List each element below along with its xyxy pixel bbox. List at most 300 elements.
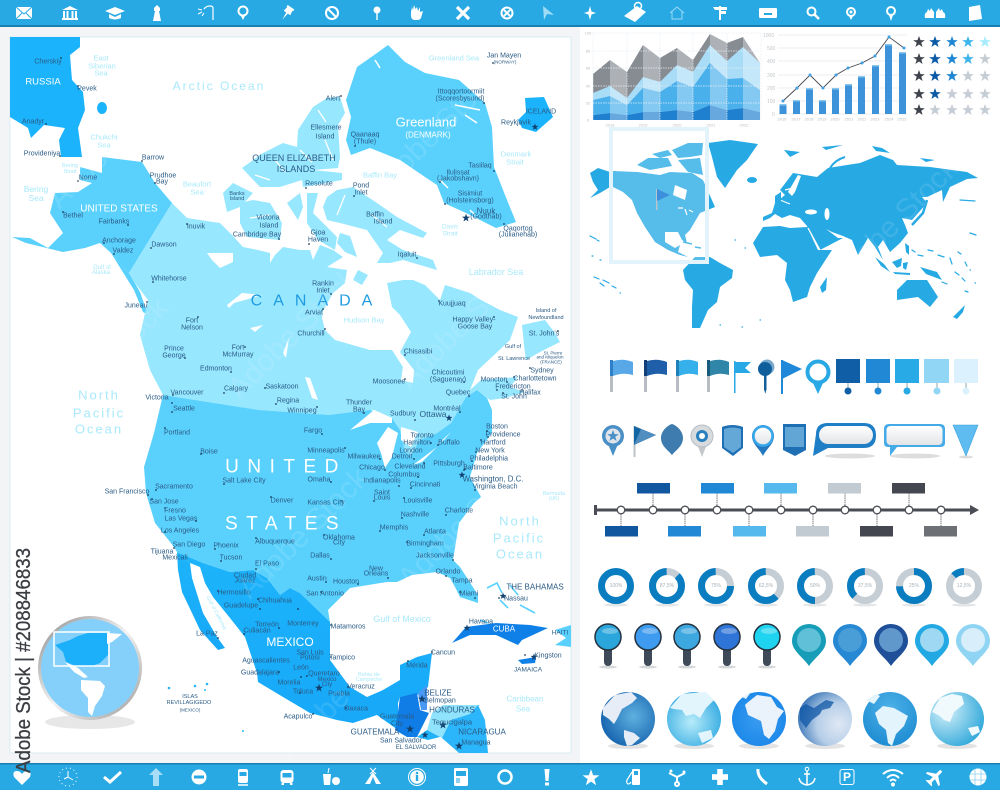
bar chart years: 2024: [885, 116, 894, 122]
city labels: Salt Lake City: [222, 478, 266, 484]
bar chart axis labels: 100: [767, 99, 776, 105]
country and region labels: THE BAHAMAS: [506, 582, 564, 592]
donut 87,5%: [646, 565, 688, 607]
icon: location ring: [238, 6, 248, 20]
city labels: Nome: [79, 174, 97, 182]
city labels: León: [293, 664, 309, 672]
city labels: St. John's: [529, 330, 560, 338]
city labels: Island: [260, 222, 278, 230]
world: Southeast Asia islands: [875, 243, 942, 280]
city labels: Haven: [308, 236, 328, 244]
donut 75%: [702, 572, 730, 600]
country and region labels: BELIZE: [424, 688, 452, 698]
city labels: Chicago: [359, 464, 385, 472]
stock watermarks: Adobe Stock: [31, 291, 176, 435]
water body labels: Baffin Bay: [363, 170, 397, 180]
pin gloss: [602, 628, 777, 634]
pin stems: [604, 645, 771, 666]
city labels: Qaqortoq: [503, 226, 533, 232]
icon: compass cross: [584, 6, 596, 20]
globe: Asia: [930, 692, 984, 746]
city labels: Newfoundland: [528, 315, 564, 321]
city labels: City: [333, 540, 346, 546]
flag three: [676, 360, 698, 392]
icon: wifi: [883, 770, 903, 786]
city labels: (Jakobshavn): [437, 176, 479, 182]
city labels: Prince: [164, 346, 184, 352]
flag two: [644, 360, 667, 392]
city labels: Ottawa: [420, 409, 447, 419]
bar chart years: 2020: [831, 116, 840, 122]
triangle flag: [781, 360, 802, 394]
world: Hudson Bay: [673, 185, 687, 200]
column highlights: [610, 33, 760, 120]
city labels: Louis: [374, 494, 391, 502]
city labels: Toluca: [293, 688, 313, 696]
city labels: Island: [316, 134, 334, 140]
city labels: Oklahoma: [323, 534, 355, 542]
icon: graduation cap: [105, 7, 125, 20]
world: South America: [683, 257, 733, 328]
city labels: Albuquerque: [255, 538, 295, 546]
world: Caribbean: [683, 242, 701, 248]
donut 100%: [602, 572, 630, 600]
city labels: Nashville: [401, 512, 429, 518]
city labels: Portland: [164, 430, 190, 436]
bar chart axis labels: 0: [772, 112, 775, 118]
Greenland: [346, 45, 516, 228]
city labels: Tampa: [451, 578, 473, 584]
city labels: Boston: [486, 424, 508, 430]
city labels: Kuujjuaq: [438, 300, 466, 308]
world: Iceland: [747, 177, 757, 183]
world: Baltic detail: [780, 188, 793, 204]
icon: ticket: [759, 8, 777, 18]
bottom toolbar band: [0, 763, 1000, 790]
city labels: Regina: [277, 398, 299, 404]
Hispaniola: [555, 625, 571, 647]
city labels: Toronto: [410, 432, 434, 440]
Honduras: [427, 705, 480, 738]
icon: paired hands: [925, 8, 945, 18]
globe: South America: [863, 692, 917, 746]
water body labels: Strait: [64, 169, 77, 175]
country and region labels: (MEXICO): [180, 708, 201, 712]
panel: glass lollipop pins: [595, 624, 780, 668]
drop pin navy: [874, 624, 908, 666]
bottom toolbar: [0, 763, 1000, 790]
panel: timeline: [594, 483, 979, 536]
Revillagigedo islands: [168, 683, 244, 732]
city labels: Nassau: [504, 596, 528, 602]
city labels: Ellesmere: [310, 124, 342, 132]
city labels: Managua: [461, 740, 491, 746]
icon: target pin: [847, 8, 855, 20]
city labels: Fresno: [164, 508, 186, 514]
city labels: Orleans: [364, 570, 389, 578]
icon: magnifier: [808, 8, 819, 19]
icon: ATM: [454, 768, 468, 786]
city labels: Qaanaaq: [351, 132, 380, 138]
icon: shower: [198, 6, 213, 20]
timeline arrow: [970, 505, 979, 515]
icon: folded map: [624, 2, 646, 22]
stock watermarks: Adobe Stock: [361, 61, 506, 205]
city labels: Edmonton: [200, 366, 232, 372]
globe: Asia Pacific: [667, 692, 721, 746]
city labels: Goose Bay: [458, 324, 493, 330]
country and region labels: [25, 76, 568, 751]
city labels: (Julianehåb): [499, 230, 537, 238]
world: Red Sea: [808, 228, 820, 250]
donut 37,5%: 37,5%: [858, 583, 873, 589]
city labels: Chihuahua: [258, 598, 292, 604]
city labels: Baltimore: [463, 464, 493, 472]
icon: parking: P: [843, 770, 851, 784]
icon: phone: [758, 769, 767, 784]
city labels: (Scoresbysund): [435, 96, 485, 102]
globe Greenland: [107, 633, 122, 644]
country and region labels: CANADA: [251, 292, 383, 310]
city labels: Kansas City: [307, 500, 345, 506]
city labels: Calgary: [224, 386, 249, 392]
city labels: San Diego: [173, 542, 205, 548]
city labels: Sydney: [530, 368, 554, 374]
city labels: New York: [475, 448, 505, 454]
city labels: Cherskiy: [34, 58, 62, 66]
inset locator globe: [38, 616, 142, 729]
water body labels: Greenland Sea: [429, 54, 480, 62]
city labels: Arviat: [305, 310, 323, 316]
globe ocean: [41, 619, 139, 717]
icon: drink and burger: [323, 768, 340, 785]
donut 100%: 100%: [610, 583, 623, 589]
world: Alaska: [590, 168, 610, 198]
world: Pacific islands: [590, 200, 976, 327]
donut 87,5%: 87,5%: [660, 583, 675, 589]
El Salvador: [417, 730, 440, 740]
water body labels: Hudson Bay: [344, 316, 385, 324]
city labels: Miami: [460, 590, 479, 598]
city labels: Iqaluit: [398, 252, 416, 258]
city labels: San Jose: [149, 498, 179, 506]
city labels: Fort: [186, 318, 198, 324]
globe: Africa: [732, 692, 786, 746]
timeline connectors: [621, 493, 941, 526]
city labels: Culiacán: [243, 628, 271, 634]
bar chart years: 2019: [818, 116, 827, 122]
city labels: Fredericton: [495, 384, 531, 390]
icon: globe: [970, 768, 986, 786]
area chart axis labels: 2021: [707, 122, 716, 128]
city labels: Happy Valley-: [452, 316, 496, 324]
city labels: Jacksonville: [416, 552, 454, 560]
city labels: Gjoa: [311, 230, 325, 236]
water body labels: Denmark: [501, 150, 531, 158]
city labels: New: [369, 566, 384, 572]
icon: no entry: [192, 770, 206, 784]
water body labels: Beaufort: [183, 180, 212, 188]
city labels: Saint: [374, 490, 390, 496]
icon: anchor: [799, 767, 815, 785]
world: Great Lakes: [678, 208, 693, 215]
country and region labels: NICARAGUA: [458, 728, 506, 736]
country and region labels: MEXICO: [266, 635, 314, 649]
city labels: Morelia: [278, 680, 301, 686]
panel: percentage donuts: [602, 565, 985, 607]
water body labels: Sea: [28, 193, 44, 203]
water body labels: [24, 54, 566, 714]
city labels: Philadelphia: [470, 456, 508, 462]
water body labels: East: [93, 54, 109, 62]
toolbar edge: [0, 25, 1000, 27]
water body labels: Ocean: [496, 546, 544, 562]
water body labels: Pacific: [493, 530, 545, 546]
area chart axis labels: 2018: [606, 122, 615, 128]
country and region labels: REVILLAGIGEDO: [167, 700, 212, 706]
round pin: [752, 425, 774, 456]
Great Lakes: [350, 410, 451, 468]
area chart axis labels: 2022: [740, 122, 749, 128]
city labels: Island: [374, 218, 392, 226]
water body labels: Campeche: [356, 677, 382, 683]
city labels: El Paso: [255, 560, 279, 568]
water body labels: Alaska: [92, 270, 111, 276]
city labels: Montréal: [433, 406, 461, 412]
area chart axis labels: 80: [586, 48, 591, 54]
city labels: Sacramento: [155, 484, 193, 490]
city labels: Austin: [307, 576, 327, 582]
water body labels: Pacific: [73, 406, 125, 420]
bar chart years: 2018: [805, 116, 814, 122]
city labels: Hermosillo: [217, 590, 251, 596]
city labels: Vancouver: [171, 390, 204, 396]
city labels: London: [399, 448, 423, 454]
world: Greenland: [708, 140, 758, 188]
icon: tent: [365, 768, 381, 784]
world: Japan: [912, 200, 927, 225]
city labels: Washington, D.C.: [463, 474, 523, 484]
city labels: San Luis: [296, 650, 324, 656]
country and region labels: UNITED: [225, 456, 347, 478]
ring marker: [808, 362, 828, 394]
city labels: Milwaukee: [347, 454, 381, 460]
top toolbar: [0, 0, 1000, 27]
globe Central America: [65, 662, 88, 678]
city labels: Anchorage: [102, 238, 136, 244]
world: Africa: [753, 226, 832, 302]
bar chart years: 2023: [871, 116, 880, 122]
city labels: Charlotte: [445, 508, 473, 514]
city labels: McMurray: [222, 352, 254, 358]
globe frame: [54, 632, 109, 666]
world: New Zealand: [953, 305, 965, 319]
city labels: Los Angeles: [161, 528, 200, 534]
icon: bank: [62, 6, 78, 20]
speech bubble two: [884, 424, 945, 458]
city labels: Anadyr: [22, 118, 45, 126]
city labels: Fairbanks: [99, 218, 130, 226]
drop pin teal: [792, 624, 826, 666]
icon: clock: [59, 768, 77, 786]
icon: bus: [280, 770, 294, 785]
country and region labels: ISLANDS: [277, 164, 315, 174]
city labels: Detroit: [392, 454, 412, 460]
panel: markers row two: [602, 423, 978, 458]
city labels: Inlet: [354, 190, 368, 196]
Baja California: [177, 552, 225, 650]
water body labels: Davis: [442, 224, 459, 230]
country and region labels: JAMAICA: [514, 666, 543, 674]
bar chart years: [778, 116, 907, 122]
city labels: Potosí: [300, 654, 320, 662]
icon: passport: [969, 5, 982, 21]
city labels: Winnipeg: [287, 408, 317, 414]
city labels: City: [391, 720, 404, 728]
city labels: Rankin: [312, 280, 334, 288]
trend points: [782, 36, 906, 102]
city labels: Tijuana: [151, 548, 173, 556]
water body labels: Bahia de: [358, 672, 380, 678]
panel: flags and markers row one: [610, 359, 978, 394]
stock watermarks: Adobe Stock: [201, 51, 346, 195]
city labels: Mérida: [406, 662, 428, 670]
stock watermarks: Adobe Stock: [231, 461, 376, 605]
water body labels: Bering: [24, 184, 49, 194]
city labels: Belmopan: [424, 698, 456, 704]
drop marker: [661, 424, 683, 455]
city labels: Queretaro: [308, 670, 340, 678]
globe: Europe: [798, 692, 852, 746]
city labels: Guadalajara: [241, 670, 279, 676]
city labels: Sisimiut: [458, 190, 482, 198]
icon: ring: [498, 770, 512, 784]
panel: area chart: [585, 30, 761, 128]
Canadian lakes: [207, 253, 318, 400]
world: Madagascar: [820, 277, 827, 293]
water body labels: Chukchi: [90, 132, 118, 142]
country and region labels: GUATEMALA: [351, 728, 400, 736]
bar chart axis labels: [763, 33, 776, 118]
capital stars: [315, 123, 538, 749]
city labels: (Holsteinsborg): [446, 198, 494, 204]
city labels: Orlando: [436, 568, 461, 576]
donut 12,5%: [943, 565, 985, 607]
square pin: [783, 424, 806, 456]
city labels: St. Lawrence: [498, 356, 530, 362]
country and region labels: QUEEN ELIZABETH: [252, 153, 336, 163]
icon: push pin: [279, 5, 294, 22]
city labels: Juárez: [234, 578, 256, 584]
triangle marker: [953, 425, 978, 458]
bottom toolbar edge: [0, 763, 1000, 764]
world: Eurasia: [763, 155, 978, 260]
city labels: Gulf of: [505, 344, 522, 350]
country and region labels: RUSSIA: [25, 76, 61, 88]
bar chart years: 2017: [792, 116, 801, 122]
country and region labels: ICELAND: [526, 108, 556, 116]
city labels: (Thule): [354, 138, 376, 146]
city labels: [22, 52, 564, 746]
city labels: Whitehorse: [151, 276, 187, 282]
city labels: Provideniya: [24, 150, 60, 158]
city labels: Island of: [536, 308, 557, 314]
city labels: Nelson: [181, 324, 203, 332]
Guatemala: [395, 693, 429, 737]
bar caps: [780, 44, 906, 106]
city labels: Ilulissat: [446, 170, 470, 176]
city labels: Cancun: [431, 650, 455, 656]
city labels: Chisasibi: [404, 348, 433, 356]
world: North America: [613, 171, 715, 257]
star pin: [602, 425, 624, 456]
icon: up arrow: [149, 768, 163, 786]
Jamaica: [518, 657, 536, 664]
pale blue layer: [593, 45, 760, 105]
city labels: Havana: [469, 618, 493, 626]
bar chart axis labels: 500: [767, 46, 776, 52]
water body labels: (UK): [549, 496, 559, 502]
city labels: Thunder: [346, 400, 373, 406]
water body labels: Gulf of Mexico: [373, 614, 431, 624]
city labels: Mexico: [317, 677, 337, 683]
city labels: Puebla: [328, 690, 350, 698]
city labels: Quebec: [446, 390, 471, 396]
icon: cross circle: [502, 8, 512, 18]
city labels: Cincinnati: [410, 482, 441, 488]
panel: North America map: [10, 37, 571, 753]
area chart axis labels: 60: [586, 66, 591, 70]
area chart axis labels: 100: [585, 30, 592, 36]
world: Australia: [897, 280, 938, 307]
bar chart years: 2025: [898, 116, 907, 122]
city labels: Inuvik: [187, 224, 206, 230]
icon: small pin: [374, 6, 380, 20]
icon: info: [408, 768, 426, 786]
city labels: Jan Mayen: [487, 52, 521, 60]
icon: plus: [712, 769, 728, 785]
stock watermarks: Adobe Stock: [391, 451, 536, 595]
Nicaragua: [442, 705, 488, 753]
city labels: Indianapolis: [363, 478, 401, 484]
city labels: Bay: [353, 406, 366, 414]
city labels: St. John: [501, 394, 527, 400]
panel: star ratings: [913, 36, 991, 115]
city labels: San Francisco: [105, 488, 149, 496]
timeline start cap: [594, 505, 597, 515]
city labels: Monterrey: [287, 620, 319, 628]
gray layer: [593, 34, 760, 98]
city labels: Dawson: [151, 242, 177, 248]
city labels: Sudbury: [390, 410, 417, 418]
city labels: Tucson: [220, 554, 242, 562]
city labels: Boise: [200, 448, 218, 456]
country and region labels: EL SALVADOR: [396, 745, 437, 751]
city labels: Nuuk: [477, 206, 496, 216]
donut 50%: [800, 572, 830, 600]
bar chart years: 2021: [845, 116, 854, 122]
city labels: Victoria: [145, 394, 169, 402]
donut 62,5%: 62,5%: [759, 583, 774, 589]
city labels: Banks: [229, 191, 245, 197]
icon: lighthouse: [153, 5, 161, 21]
Mexico: [177, 552, 432, 730]
city labels: Chicoutimi: [432, 370, 465, 376]
country and region labels: Greenland: [396, 114, 456, 130]
bar chart axis labels: 300: [767, 73, 776, 79]
city labels: Valdez: [113, 248, 134, 254]
city labels: Las Vegas: [165, 516, 198, 522]
